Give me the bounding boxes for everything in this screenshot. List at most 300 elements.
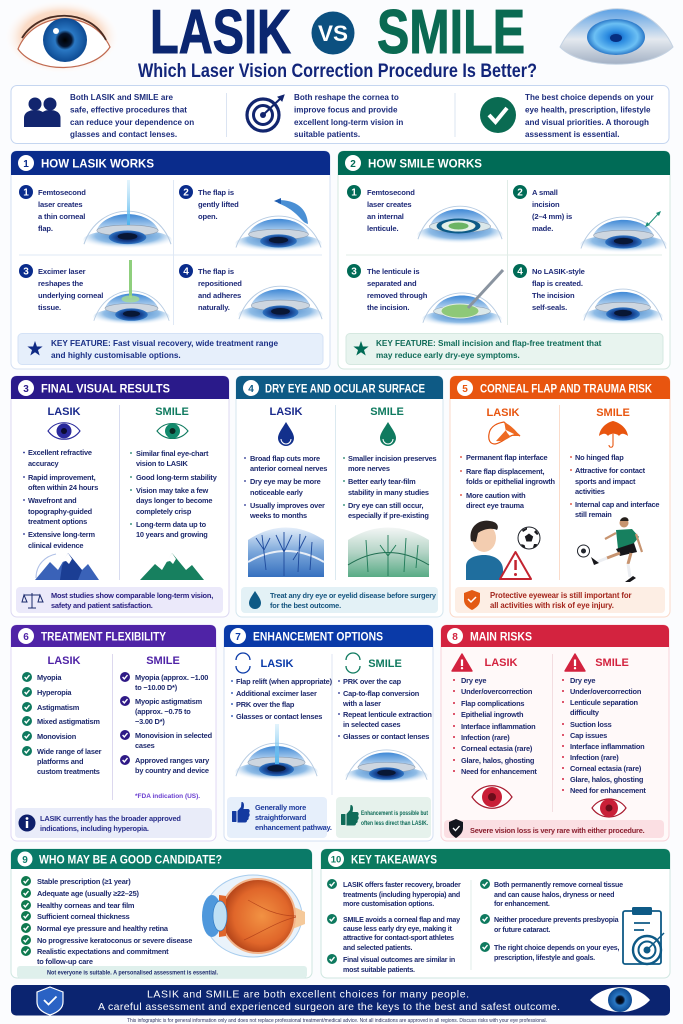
bullet list: Attractive for contact xyxy=(575,466,646,475)
list text: Approved ranges vary xyxy=(135,756,210,765)
right column: and can cause halos, dryness or need xyxy=(494,891,614,899)
check list: Stable prescription (≥1 year) xyxy=(37,877,131,886)
step 2 xyxy=(179,185,322,254)
right column: The right choice depends on your eyes, xyxy=(494,944,620,952)
list text: Hyperopia xyxy=(37,688,72,697)
bullet list: weeks to months xyxy=(249,511,307,520)
heading: 10 xyxy=(331,854,341,866)
bullet list: Glasses or contact lenses xyxy=(343,732,429,741)
step 2: incision xyxy=(532,200,560,209)
bullet list: treatment options xyxy=(28,517,87,526)
step 1: a thin corneal xyxy=(38,212,85,221)
bullet list: Under/overcorrection xyxy=(570,687,642,696)
list text: Wide range of laser xyxy=(37,747,102,756)
SMILE column: SMILE xyxy=(368,658,402,670)
icon: red eye xyxy=(472,786,512,808)
list text: Monovision in selected xyxy=(135,731,213,740)
bullet list: still remain xyxy=(575,510,612,519)
callout: Enhancement is possible but xyxy=(361,811,428,817)
intro text 3: assessment is essential. xyxy=(525,130,620,139)
bullet list: PRK over the flap xyxy=(236,700,295,709)
icon: human eye xyxy=(4,0,120,74)
bullet list xyxy=(570,453,659,519)
bullet list xyxy=(343,454,437,520)
step 4: and adheres xyxy=(198,291,241,300)
panel: final visual results xyxy=(11,376,229,617)
bullet list: Extensive long-term xyxy=(28,530,95,539)
bullet list: with a laser xyxy=(342,699,381,708)
bullet list: vision to LASIK xyxy=(136,459,188,468)
bullet list: Broad flap cuts more xyxy=(250,454,320,463)
step 3: 3 xyxy=(23,266,29,278)
heading: 8 xyxy=(452,632,458,643)
LASIK column xyxy=(452,654,537,808)
step 3 xyxy=(347,264,503,329)
title LASIK: LASIK xyxy=(150,0,291,67)
panel: who may be a good candidate xyxy=(11,849,312,978)
bullet list xyxy=(562,676,646,795)
bullet list: direct eye trauma xyxy=(466,501,525,510)
illustration: soccer player xyxy=(578,517,642,582)
step 3: removed through xyxy=(367,291,428,300)
bullet list: anterior corneal nerves xyxy=(250,464,327,473)
step 4: No LASIK-style xyxy=(532,267,585,276)
bullet list: Suction loss xyxy=(570,720,612,729)
LASIK column xyxy=(460,407,556,580)
step 2: The flap is xyxy=(198,188,234,197)
icon: eye xyxy=(48,423,80,439)
bullet list: Similar final eye-chart xyxy=(136,449,209,458)
bullet list: Glasses or contact lenses xyxy=(236,712,322,721)
banner: conclusion xyxy=(11,985,670,1016)
check list: Sufficient corneal thickness xyxy=(37,912,130,921)
panel: enhancement options xyxy=(224,625,433,841)
note: Severe vision loss is very rare with either procedure. xyxy=(470,826,645,835)
step 3: underlying corneal xyxy=(38,291,103,300)
bullet list: Need for enhancement xyxy=(461,767,537,776)
panel: key takeaways xyxy=(321,849,670,978)
step 2: 2 xyxy=(517,188,523,198)
bullet list: activities xyxy=(575,487,605,496)
heading: 5 xyxy=(462,384,468,395)
disclaimer: This infographic is for general information only and does not replace professional treatment/medical advice. Not all indications are approved in all regions. Discuss risks with your eye professional. xyxy=(127,1018,547,1024)
bullet list: especially if pre-existing xyxy=(348,511,429,520)
intro text 1: glasses and contact lenses. xyxy=(70,130,177,139)
check list xyxy=(22,672,32,756)
left column: and selected patients. xyxy=(343,944,413,952)
bullet list: Glare, halos, ghosting xyxy=(461,756,535,765)
heading: WHO MAY BE A GOOD CANDIDATE? xyxy=(39,852,222,866)
key feature: KEY FEATURE: Fast visual recovery, wide treatment range xyxy=(51,339,278,348)
conclusion text: A careful assessment and experienced surgeon are the keys to the best and safest outcome. xyxy=(98,1001,560,1013)
bullet list: Vision may take a few xyxy=(136,486,209,495)
bullet list: days longer to become xyxy=(136,496,212,505)
SMILE column xyxy=(120,655,213,800)
bullet list: completely crisp xyxy=(136,507,192,516)
SMILE column: SMILE xyxy=(370,406,404,418)
left column: LASIK offers faster recovery, broader xyxy=(343,881,461,889)
callout: enhancement pathway. xyxy=(255,823,332,832)
icon: cycle xyxy=(236,653,250,673)
right column: Both permanently remove corneal tissue xyxy=(494,881,623,889)
step 1: 1 xyxy=(23,188,29,198)
check list: Healthy corneas and tear film xyxy=(37,901,135,910)
icon: mountains xyxy=(140,553,204,580)
bullet list: Internal cap and interface xyxy=(575,500,659,509)
heading: MAIN RISKS xyxy=(470,629,532,643)
note xyxy=(15,808,212,838)
subtitle: Which Laser Vision Correction Procedure Is Better? xyxy=(138,61,537,82)
icon: eye xyxy=(590,987,650,1012)
icon: warning xyxy=(565,654,585,671)
bullet list xyxy=(338,677,432,741)
icon: info xyxy=(18,814,36,832)
heading: 2 xyxy=(350,159,356,170)
heading: ENHANCEMENT OPTIONS xyxy=(253,629,383,643)
heading: 3 xyxy=(23,384,29,395)
footnote: *FDA indication (US). xyxy=(135,793,200,800)
LASIK column xyxy=(23,406,99,580)
list text: Astigmatism xyxy=(37,703,80,712)
callout: often less direct than LASIK. xyxy=(361,821,428,827)
icon: mountains xyxy=(35,553,99,580)
step 4: flap is created. xyxy=(532,279,583,288)
icon: umbrella xyxy=(599,421,628,447)
step 1: laser creates xyxy=(38,200,82,209)
check list: Realistic expectations and commitment xyxy=(37,947,169,956)
bullet list: Cap issues xyxy=(570,731,607,740)
bullet list: Dry eye xyxy=(461,676,486,685)
image: eye xyxy=(345,750,428,786)
right column: Neither procedure prevents presbyopia xyxy=(494,916,619,924)
LASIK column xyxy=(22,655,102,776)
heading: HOW SMILE WORKS xyxy=(368,156,482,170)
SMILE column xyxy=(130,406,218,580)
step 2: A small xyxy=(532,188,558,197)
SMILE column: SMILE xyxy=(596,407,630,419)
callout: Generally more xyxy=(255,803,306,812)
right column: for enhancement. xyxy=(494,900,550,908)
bullet list: Epithelial ingrowth xyxy=(461,710,524,719)
note xyxy=(16,587,223,613)
step 3: 3 xyxy=(351,266,357,278)
bullet list: Smaller incision preserves xyxy=(348,454,437,463)
bullet list xyxy=(130,449,218,539)
bullet list: topography-guided xyxy=(28,507,93,516)
step 2: 2 xyxy=(183,188,189,198)
check list: No progressive keratoconus or severe disease xyxy=(37,936,192,945)
bullet list: Flap relift (when appropriate) xyxy=(236,677,333,686)
list text: Mixed astigmatism xyxy=(37,717,100,726)
intro text 1: safe, effective procedures that xyxy=(70,106,187,114)
step 1: lenticule. xyxy=(367,224,398,233)
image: eye with laser xyxy=(235,724,318,783)
heading xyxy=(230,628,383,644)
panel: treatment flexibility xyxy=(11,625,216,841)
LASIK column: LASIK xyxy=(486,407,520,419)
note xyxy=(17,966,307,978)
icon: shield xyxy=(37,987,63,1015)
intro text 3: eye health, prescription, lifestyle xyxy=(525,106,651,114)
bullet list: Dry eye may be more xyxy=(250,477,321,486)
bullet list: Interface inflammation xyxy=(461,722,536,731)
bullet list: Additional excimer laser xyxy=(236,689,317,698)
SMILE column xyxy=(336,653,432,838)
bullet list xyxy=(231,677,333,721)
step 4 xyxy=(179,264,323,326)
heading xyxy=(447,628,532,644)
SMILE column xyxy=(562,654,646,817)
step 3: reshapes the xyxy=(38,279,83,288)
icon: drop xyxy=(249,591,261,609)
intro text 1: can reduce your dependence on xyxy=(70,118,194,127)
note: Not everyone is suitable. A personalised assessment is essential. xyxy=(47,970,218,976)
bullet list: Usually improves over xyxy=(250,501,325,510)
left column: SMILE avoids a corneal flap and may xyxy=(343,916,460,924)
title header xyxy=(4,0,673,82)
check list xyxy=(21,876,192,966)
heading xyxy=(18,628,166,644)
bullet list: Flap complications xyxy=(461,699,524,708)
icon: warning xyxy=(452,654,472,671)
heading xyxy=(457,380,652,396)
list text: cases xyxy=(135,741,155,750)
heading: DRY EYE AND OCULAR SURFACE xyxy=(265,381,425,395)
step 4: repositioned xyxy=(198,279,242,288)
bullet list: Excellent refractive xyxy=(28,448,92,457)
panel: intro xyxy=(11,86,669,144)
badge VS: VS xyxy=(318,21,348,46)
bullet list: Cap-to-flap conversion xyxy=(343,689,420,698)
key feature: and highly customisable options. xyxy=(51,351,181,360)
title SMILE: SMILE xyxy=(377,0,525,67)
icon: people xyxy=(24,98,60,127)
heading xyxy=(243,380,425,396)
step 4: The incision xyxy=(532,291,575,300)
list text: Myopia (approx. −1.00 xyxy=(135,673,208,682)
bullet list: Dry eye xyxy=(570,676,595,685)
right column: prescription, lifestyle and goals. xyxy=(494,954,595,962)
LASIK column xyxy=(227,653,333,838)
right column: or future cataract. xyxy=(494,926,550,934)
step 3: separated and xyxy=(367,279,417,288)
check list: to follow-up care xyxy=(37,957,93,966)
heading: FINAL VISUAL RESULTS xyxy=(41,381,170,395)
bullet list: in selected cases xyxy=(343,720,400,729)
note: Most studies show comparable long-term vision, xyxy=(51,591,213,600)
SMILE column: SMILE xyxy=(155,406,189,418)
bullet list: Better early tear-film xyxy=(348,477,416,486)
LASIK column: LASIK xyxy=(270,406,303,418)
LASIK column xyxy=(244,406,327,577)
bullet list: PRK over the cap xyxy=(343,677,402,686)
key feature: KEY FEATURE: Small incision and flap-free treatment that xyxy=(376,339,602,348)
intro text 2: Both reshape the cornea to xyxy=(294,93,399,102)
bullet list: difficulty xyxy=(570,708,600,717)
step 1 xyxy=(347,185,503,246)
icon: check xyxy=(480,97,516,133)
left column: attractive for contact-sport athletes xyxy=(343,934,454,942)
step 4: naturally. xyxy=(198,303,230,312)
icon: drop xyxy=(380,422,396,446)
bullet list: More caution with xyxy=(466,491,526,500)
icon: shield xyxy=(464,590,480,610)
list text: to −10.00 D*) xyxy=(135,683,178,692)
step 4: 4 xyxy=(517,266,523,278)
intro text 1: Both LASIK and SMILE are xyxy=(70,93,173,102)
bullet list: Glare, halos, ghosting xyxy=(570,775,644,784)
bullet list: 10 years and growing xyxy=(136,530,208,539)
bullet list: sports and impact xyxy=(575,477,636,486)
bullet list: Dry eye can still occur, xyxy=(348,501,423,510)
key feature: may reduce early dry-eye symptoms. xyxy=(376,351,520,360)
list text: Myopia xyxy=(37,673,62,682)
note: indications, including hyperopia. xyxy=(40,824,149,833)
heading: 6 xyxy=(23,632,29,643)
heading xyxy=(18,380,170,396)
panel: corneal flap and trauma risk xyxy=(450,376,670,617)
icon: drop xyxy=(278,422,294,446)
step 3: The lenticule is xyxy=(367,267,419,276)
bullet list: Rapid improvement, xyxy=(28,473,96,482)
panel: how LASIK works xyxy=(11,151,330,369)
bullet list: often within 24 hours xyxy=(28,483,98,492)
left column: most suitable patients. xyxy=(343,966,415,974)
intro text 2: excellent long-term vision in xyxy=(294,118,403,127)
list text: Myopic astigmatism xyxy=(135,697,203,706)
bullet list: Corneal ectasia (rare) xyxy=(570,764,642,773)
step 1 xyxy=(19,180,172,251)
bullet list: Infection (rare) xyxy=(461,733,510,742)
step 1: laser creates xyxy=(367,200,412,209)
step 2 xyxy=(513,185,667,255)
bullet list: accuracy xyxy=(28,459,60,468)
note: safety and patient satisfaction. xyxy=(51,601,153,610)
LASIK column: LASIK xyxy=(48,406,81,418)
left column: more customisation options. xyxy=(343,900,434,908)
panel: main risks xyxy=(441,625,669,841)
bullet list: Lenticule separation xyxy=(570,698,639,707)
note xyxy=(444,819,664,838)
heading: TREATMENT FLEXIBILITY xyxy=(41,629,166,643)
step 4: The flap is xyxy=(198,267,234,276)
icon: target xyxy=(247,95,284,131)
bullet list: Infection (rare) xyxy=(570,753,619,762)
icon: red eye xyxy=(592,799,626,817)
intro text 2: improve focus and provide xyxy=(294,106,398,114)
step 1: flap. xyxy=(38,224,53,233)
step 4: 4 xyxy=(183,266,189,278)
bullet list: Repeat lenticule extraction xyxy=(343,710,432,719)
image: eye anatomy xyxy=(202,875,305,957)
key feature xyxy=(18,334,323,364)
image: nerve cross-section xyxy=(348,528,429,577)
step 1: Femtosecond xyxy=(367,188,415,197)
left column xyxy=(327,879,461,974)
icon: cycle xyxy=(346,653,360,673)
icon: eye xyxy=(157,424,188,438)
bullet list: Rare flap displacement, xyxy=(466,467,545,476)
badge VS xyxy=(312,12,354,54)
SMILE column xyxy=(343,406,437,577)
step 1: an internal xyxy=(367,212,404,221)
SMILE column xyxy=(570,407,659,582)
illustration: boy hit by ball xyxy=(466,521,540,580)
step 3 xyxy=(19,260,170,327)
note xyxy=(241,587,438,613)
list text: platforms and xyxy=(37,757,84,766)
list text: Monovision xyxy=(37,732,77,741)
panel: dry eye and ocular surface xyxy=(236,376,443,617)
LASIK column: LASIK xyxy=(484,657,518,669)
heading: 7 xyxy=(235,632,241,643)
heading: KEY TAKEAWAYS xyxy=(351,852,437,866)
list text: (approx. −0.75 to xyxy=(135,707,191,716)
intro text 2: suitable patients. xyxy=(294,130,360,139)
icon: shield xyxy=(449,819,463,838)
intro text 3: The best choice depends on your xyxy=(525,93,654,102)
bullet list: Interface inflammation xyxy=(570,742,645,751)
bullet list: Under/overcorrection xyxy=(461,687,533,696)
bullet list: more nerves xyxy=(348,464,390,473)
callout: straightforward xyxy=(255,813,307,822)
list text: by country and device xyxy=(135,766,209,775)
bullet list: Need for enhancement xyxy=(570,786,646,795)
list text: custom treatments xyxy=(37,767,100,776)
check list: Normal eye pressure and healthy retina xyxy=(37,924,169,933)
note: Treat any dry eye or eyelid disease before surgery xyxy=(270,591,437,600)
note: LASIK currently has the broader approved xyxy=(40,814,181,823)
icon: cornea eye xyxy=(560,9,673,64)
note: for the best outcome. xyxy=(270,601,341,610)
step 4: self-seals. xyxy=(532,303,567,312)
icon: flap xyxy=(489,422,520,444)
check list xyxy=(120,672,130,765)
bullet list xyxy=(453,676,537,776)
step 2: gently lifted xyxy=(198,200,239,209)
heading xyxy=(328,851,437,867)
intro text 3: and visual priorities. A thorough xyxy=(525,118,649,127)
step 2: (2–4 mm) is xyxy=(532,212,572,221)
icon: clipboard and target xyxy=(623,907,664,964)
check list: Adequate age (usually ≥22–25) xyxy=(37,889,140,898)
note xyxy=(455,587,665,613)
step 3: the incision. xyxy=(367,303,409,312)
bullet list xyxy=(244,454,327,520)
left column: cause less early dry eye, making it xyxy=(343,925,452,933)
key feature xyxy=(346,334,663,364)
bullet list xyxy=(23,448,98,550)
step 4 xyxy=(513,264,663,327)
step 2: open. xyxy=(198,212,218,221)
bullet list: Permanent flap interface xyxy=(466,453,548,462)
bullet list: noticeable early xyxy=(250,488,304,497)
icon: scales xyxy=(22,593,43,608)
heading: 1 xyxy=(23,159,29,170)
step 1: Femtosecond xyxy=(38,188,86,197)
heading: HOW LASIK WORKS xyxy=(41,156,154,170)
conclusion text: LASIK and SMILE are both excellent choices for many people. xyxy=(147,988,469,1000)
step 2: made. xyxy=(532,224,553,233)
LASIK column: LASIK xyxy=(260,658,294,670)
bullet list: stability in many studies xyxy=(348,488,429,497)
bullet list: No hinged flap xyxy=(575,453,624,462)
note: Protective eyewear is still important for xyxy=(490,591,632,600)
bullet list xyxy=(460,453,556,510)
left column: treatments (including hyperopia) and xyxy=(343,891,460,899)
step 1: 1 xyxy=(351,188,357,198)
SMILE column: SMILE xyxy=(595,657,629,669)
